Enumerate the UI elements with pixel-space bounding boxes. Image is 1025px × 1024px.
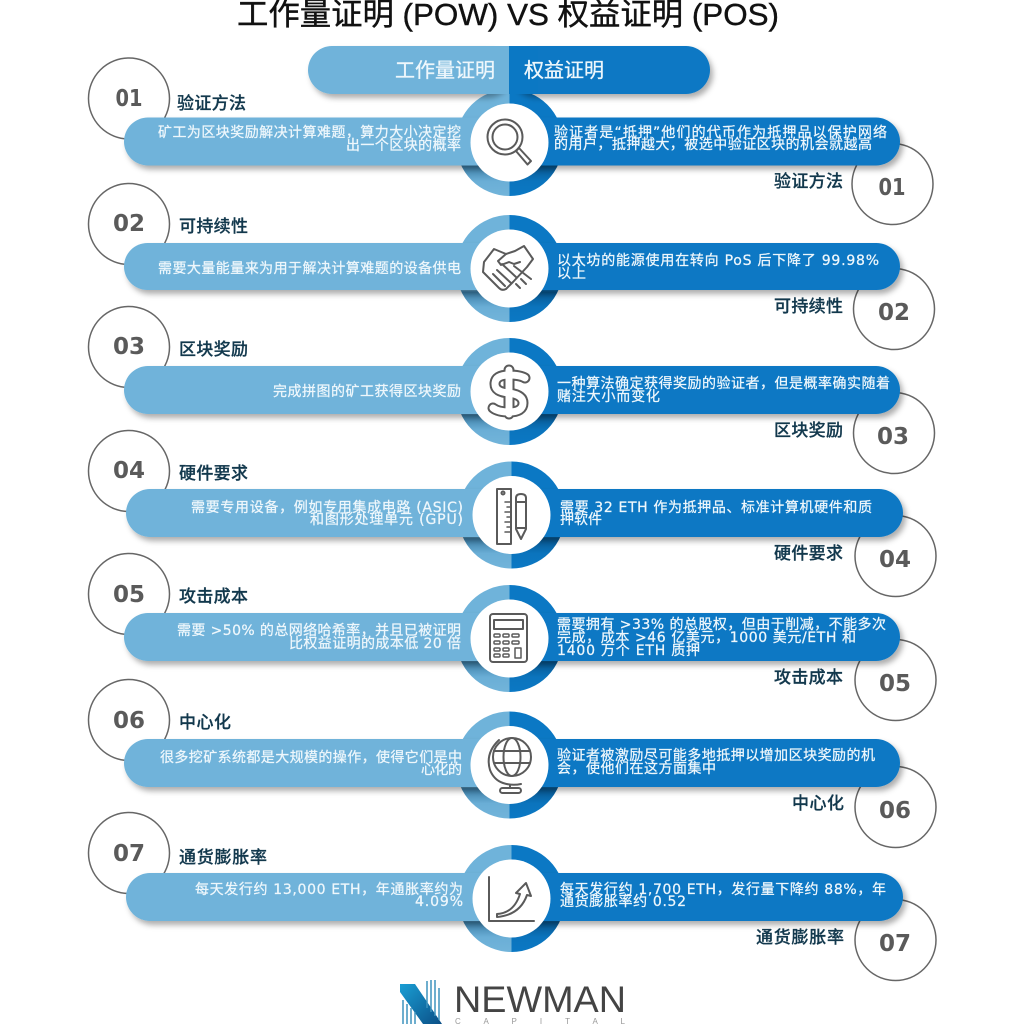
center ring: [456, 215, 563, 322]
logo: Newman Capital: [400, 979, 626, 1024]
left text: [160, 749, 462, 778]
right text: 会，使他们在这方面集中: [557, 760, 716, 777]
right number circle: 04: [879, 547, 911, 573]
icon: ruler and pencil: [497, 489, 526, 544]
pill right: proof of stake: [509, 46, 710, 94]
left text: 完成拼图的矿工获得区块奖励: [273, 383, 461, 400]
right number circle: [855, 516, 936, 596]
white icon disc: [472, 860, 550, 938]
left bar: [126, 489, 511, 537]
left number circle: [88, 58, 170, 139]
left bar: [124, 118, 509, 166]
left text: 出一个区块的概率: [346, 137, 461, 154]
left text: 比权益证明的成本低 20 倍: [289, 636, 461, 652]
right bar: [509, 366, 900, 414]
icon: calculator: [490, 614, 527, 662]
left heading: 通货膨胀率: [179, 847, 267, 867]
left text: 需要 >50% 的总网络哈希率，并且已被证明: [177, 622, 461, 639]
center ring: [458, 462, 565, 568]
center ring: [456, 89, 563, 196]
left heading: 验证方法: [177, 93, 246, 113]
right text: 赌注大小而变化: [557, 389, 660, 405]
row 6: centralization: [88, 680, 936, 848]
square seam cover: [480, 46, 509, 94]
logo mark: [400, 980, 442, 1024]
right text: 每天发行约 1,700 ETH，发行量下降约 88%，年: [560, 882, 886, 898]
right text: 的用户，抵押越大，被选中验证区块的机会就越高: [554, 136, 872, 153]
center ring: [456, 712, 563, 818]
left bar: [126, 873, 511, 921]
right number circle: 05: [879, 671, 911, 697]
right bar: [511, 489, 903, 537]
left number circle: 01: [116, 86, 142, 112]
right text: 通货膨胀率约 0.52: [560, 893, 686, 910]
row 1: validation method: [88, 58, 933, 224]
icon: handshake: [483, 246, 533, 290]
left number circle: [88, 306, 170, 388]
left number circle: 06: [113, 708, 145, 734]
right number circle: 03: [877, 424, 909, 450]
right bar: [509, 243, 900, 290]
white icon disc: [470, 230, 548, 308]
left heading: 可持续性: [179, 217, 248, 236]
right text: [557, 747, 875, 777]
left text: 每天发行约 13,000 ETH，年通胀率约为: [195, 881, 463, 898]
right text: 需要拥有 >33% 的总股权，但由于削减，不能多次: [557, 616, 886, 633]
left text: [195, 881, 463, 910]
right bar: [509, 118, 900, 166]
left number circle: [88, 430, 170, 512]
square seam cover: [509, 46, 538, 94]
header pill: [308, 46, 710, 94]
icon: globe: [489, 738, 531, 793]
right text: [560, 500, 872, 528]
right text: 1400 万个 ETH 质押: [557, 643, 700, 659]
right text: [557, 616, 886, 659]
right text: [557, 252, 879, 282]
pill left label: 工作量证明: [395, 59, 495, 82]
right number circle: [855, 640, 936, 720]
left text: 心化的: [421, 762, 462, 778]
right heading: 可持续性: [774, 297, 843, 316]
left text: 4.09%: [415, 894, 463, 910]
left number circle: 03: [113, 334, 145, 360]
left heading: 硬件要求: [179, 464, 248, 483]
right heading: 攻击成本: [774, 668, 843, 687]
left number circle: [88, 184, 170, 264]
white icon disc: [472, 476, 550, 554]
right number circle: 07: [879, 931, 911, 957]
right text: 押软件: [560, 512, 602, 528]
left text: 需要专用设备，例如专用集成电路 (ASIC): [191, 499, 463, 516]
white icon disc: [470, 352, 548, 430]
icon: dollar sign: [493, 370, 525, 414]
left number circle: [88, 812, 170, 894]
left bar: [124, 366, 509, 414]
right number circle: 02: [878, 300, 910, 326]
center ring: [458, 845, 565, 952]
right heading: 硬件要求: [774, 544, 843, 563]
row 7: inflation rate: [88, 812, 936, 980]
right number circle: 06: [879, 798, 911, 824]
left heading: 区块奖励: [179, 340, 248, 359]
row 2: sustainability: [88, 184, 934, 350]
left bar: [124, 243, 509, 290]
right bar: [511, 873, 903, 921]
row 3: block reward: [88, 306, 934, 474]
left text: 和图形处理单元 (GPU): [310, 512, 463, 528]
left number circle: 02: [113, 211, 145, 237]
left text: [158, 124, 461, 154]
left text: 需要大量能量来为用于解决计算难题的设备供电: [158, 260, 461, 277]
right bar: [509, 613, 900, 661]
white icon disc: [470, 104, 548, 182]
right number circle: [852, 144, 933, 224]
right text: [557, 375, 890, 405]
icon: magnifier: [488, 120, 531, 164]
right text: [554, 125, 887, 153]
right text: 验证者被激励尽可能多地抵押以增加区块奖励的机: [557, 747, 875, 764]
right heading: 中心化: [792, 794, 844, 813]
right number circle: [855, 900, 936, 980]
center ring: [456, 585, 563, 692]
white icon disc: [470, 726, 548, 804]
left number circle: [88, 554, 170, 634]
logo wordmark: NEWMAN: [454, 979, 626, 1020]
right text: 以上: [557, 266, 586, 282]
right heading: 区块奖励: [774, 421, 843, 440]
right text: [560, 882, 886, 910]
left bar: [124, 739, 509, 787]
left number circle: [88, 680, 170, 760]
right heading: 验证方法: [774, 171, 843, 191]
right text: 完成，成本 >46 亿美元，1000 美元/ETH 和: [557, 630, 856, 646]
right bar: [509, 739, 900, 787]
right text: 以太坊的能源使用在转向 PoS 后下降了 99.98%: [557, 252, 879, 269]
left text: 矿工为区块奖励解决计算难题，算力大小决定挖: [158, 124, 461, 141]
right number circle: [855, 766, 936, 848]
right text: 需要 32 ETH 作为抵押品、标准计算机硬件和质: [560, 500, 872, 516]
left heading: 攻击成本: [179, 587, 248, 606]
left number circle: 04: [113, 458, 145, 484]
row 5: attack cost: [88, 554, 936, 720]
icon: growth chart: [489, 877, 534, 921]
left bar: [124, 613, 509, 661]
left text: 很多挖矿系统都是大规模的操作，使得它们是中: [160, 749, 462, 766]
row 4: hardware requirements: [88, 430, 936, 596]
pill right label: 权益证明: [524, 59, 604, 82]
right heading: 通货膨胀率: [756, 927, 844, 947]
right text: 一种算法确定获得奖励的验证者，但是概率确实随着: [557, 375, 890, 392]
pill left: proof of work: [308, 46, 509, 94]
right number circle: [854, 268, 934, 350]
center ring: [456, 338, 563, 445]
right text: 验证者是“抵押”他们的代币作为抵押品以保护网络: [554, 125, 887, 141]
left number circle: 07: [113, 841, 145, 867]
left heading: 中心化: [179, 713, 231, 732]
right number circle: [854, 392, 934, 474]
right number circle: 01: [878, 175, 906, 201]
left text: [191, 499, 463, 528]
left text: [177, 622, 461, 652]
left number circle: 05: [113, 582, 145, 608]
white icon disc: [470, 600, 548, 678]
